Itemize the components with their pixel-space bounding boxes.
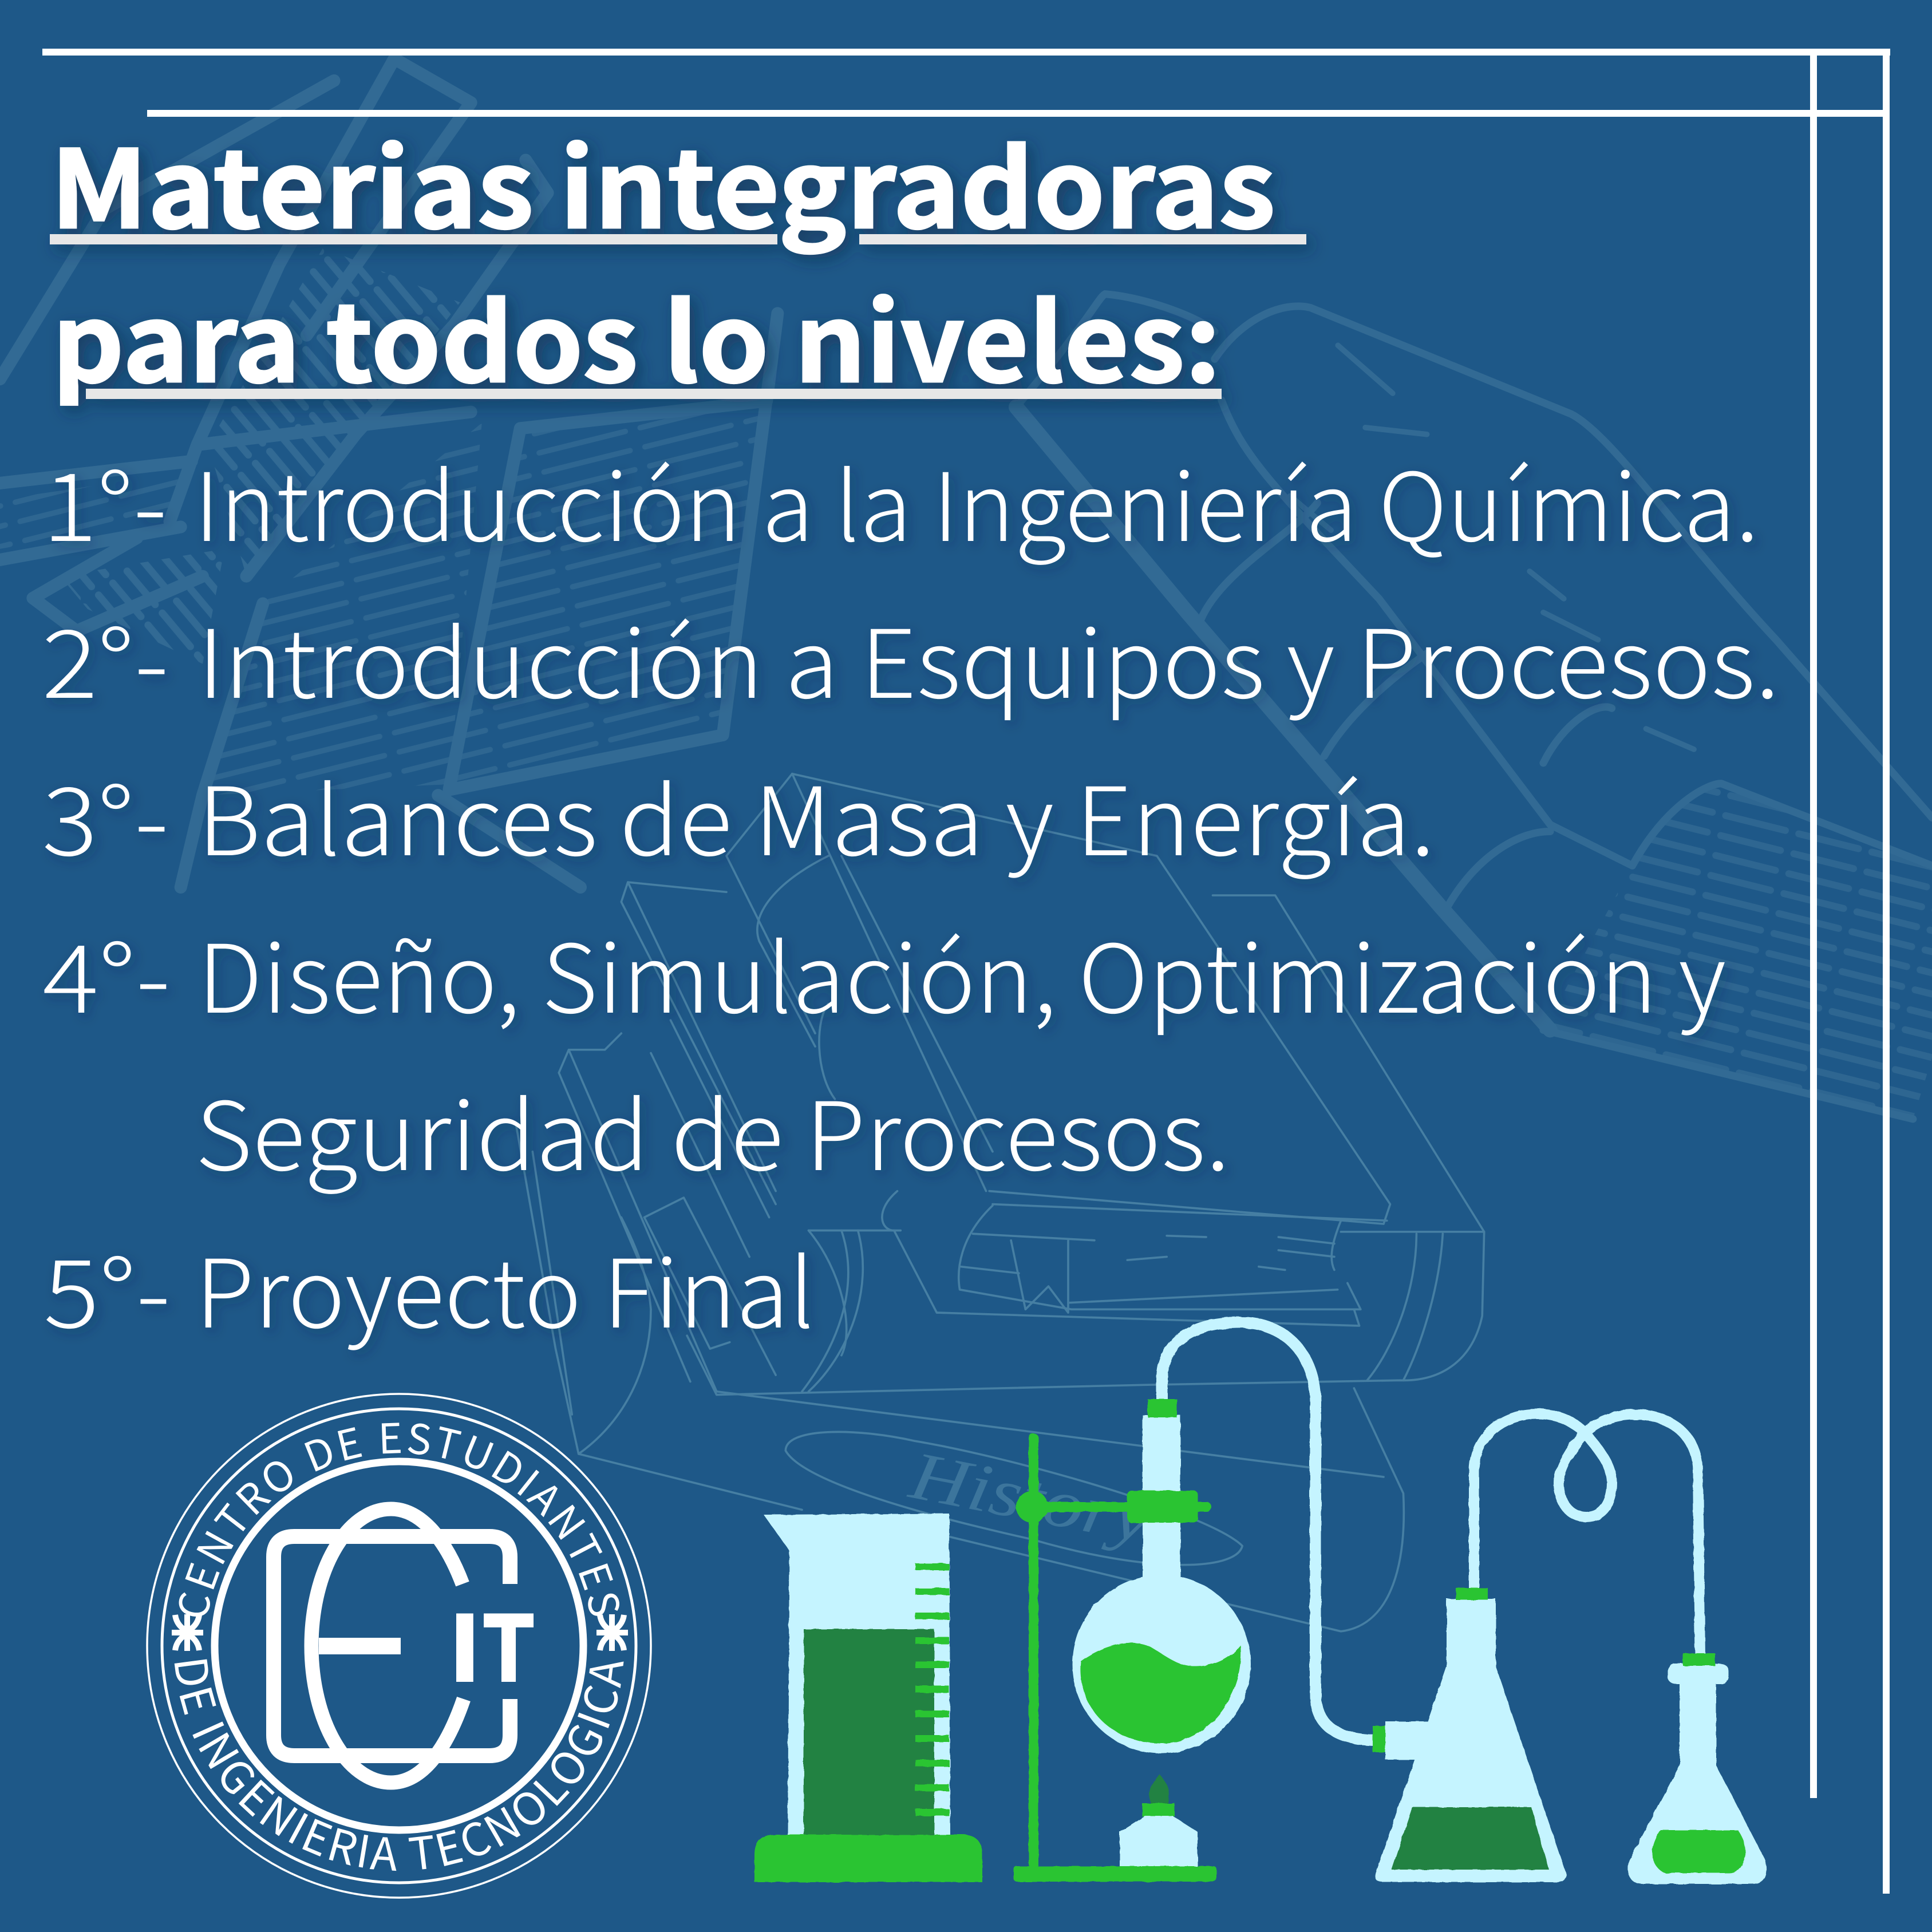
title: para todos lo niveles: — [52, 258, 1221, 413]
logo: CEIT seal — [146, 1393, 652, 1899]
watermark: closed book sketch — [1016, 294, 1932, 1119]
logo: CEIT seal: T — [484, 1595, 533, 1700]
watermark: open book sketch — [0, 59, 777, 887]
watermark: thin-line book: History — [903, 1437, 1158, 1558]
subject list: 3°- — [42, 746, 169, 883]
title: Materias integradoras — [50, 104, 1275, 259]
subject list: 4°- — [42, 903, 171, 1040]
connecting tube 1 — [1162, 1322, 1374, 1740]
subject list: 5°- — [44, 1218, 171, 1355]
filter flask — [1373, 1588, 1566, 1882]
watermark: thin-line book — [516, 774, 1484, 1631]
subject list: Balances de Masa y Energía. — [197, 746, 1435, 883]
subject list: 1°- — [42, 432, 167, 568]
subject list: Seguridad de Procesos. — [195, 1061, 1230, 1198]
subject list: Introducción a Esquipos y Procesos. — [197, 588, 1780, 725]
subject list: Introducción a la Ingeniería Química. — [194, 432, 1759, 568]
logo: CEIT seal: CENTRO DE ESTUDIANTES — [179, 1423, 619, 1617]
title — [50, 104, 1306, 413]
subject list: Diseño, Simulación, Optimización y — [197, 903, 1726, 1040]
logo: CEIT seal: DE INGENIERIA TECNOLOGICA — [174, 1659, 624, 1871]
subject list: 2°- — [42, 588, 169, 725]
round-bottom flask — [1072, 1399, 1251, 1753]
beaker — [754, 1514, 982, 1882]
subject list — [42, 432, 1780, 1355]
retort stand — [1014, 1433, 1216, 1882]
burner — [1120, 1774, 1198, 1866]
small conical flask — [1628, 1653, 1767, 1884]
logo: CEIT seal: I — [452, 1595, 478, 1700]
connecting tube 2 — [1474, 1414, 1700, 1656]
subject list: Proyecto Final — [195, 1218, 815, 1355]
